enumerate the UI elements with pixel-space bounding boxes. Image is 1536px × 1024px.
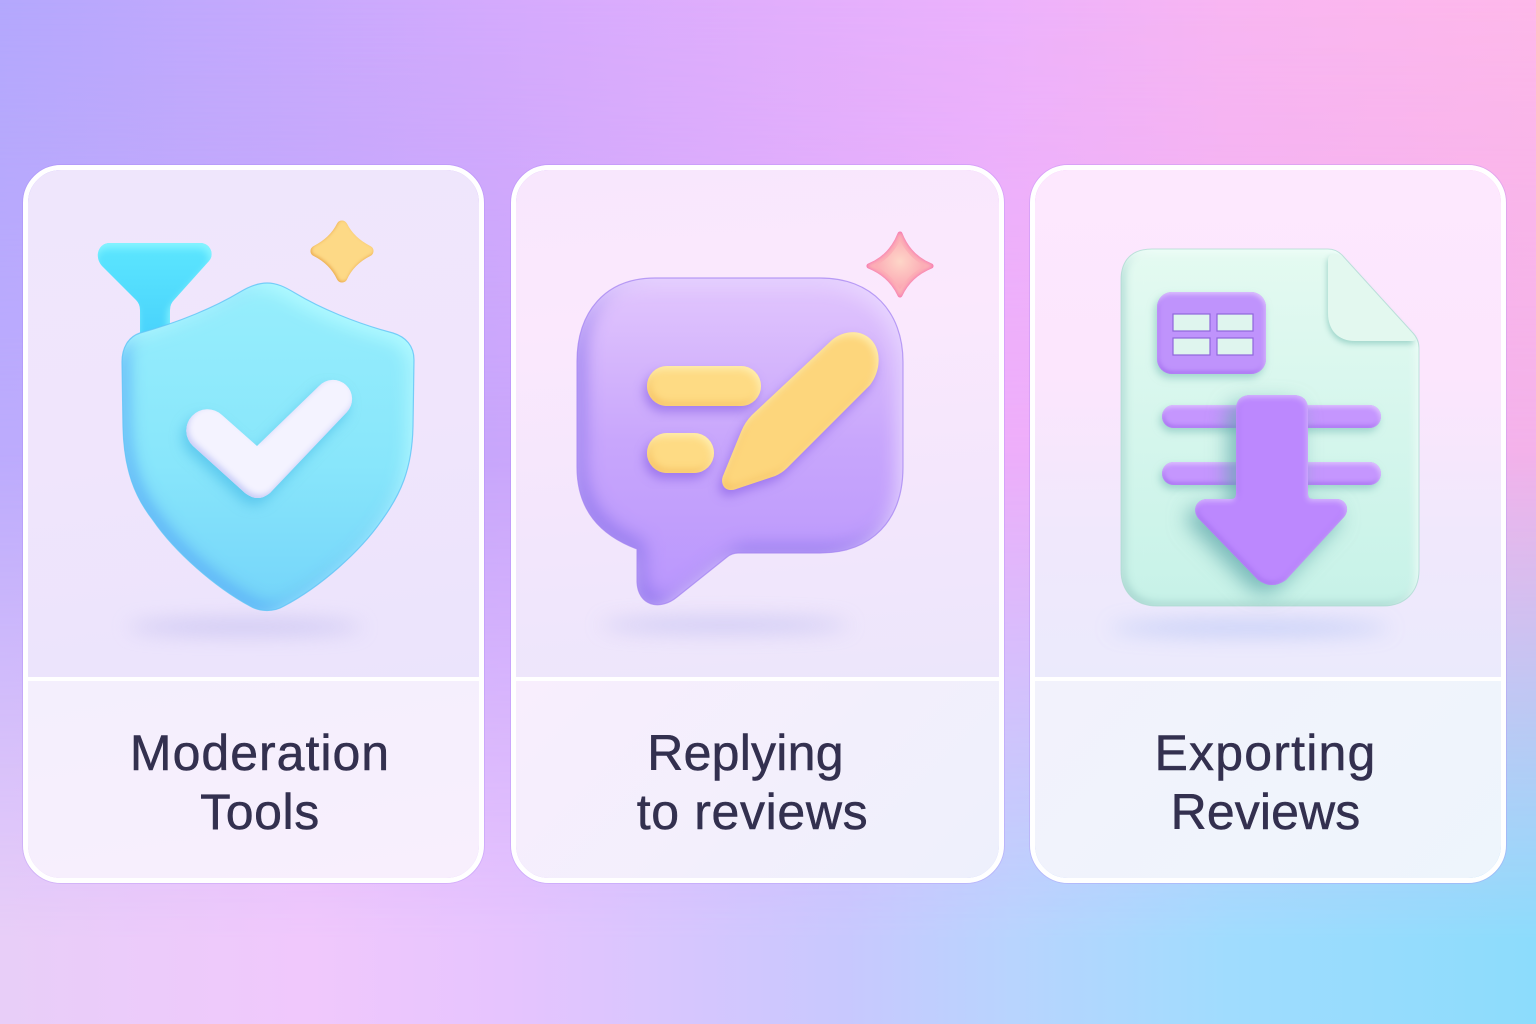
icon: folded corner: [1328, 254, 1415, 341]
panel: replying to reviews: [511, 165, 1004, 883]
label: Exporting Reviews: Exporting: [1154, 724, 1377, 780]
icon: text rows: [1162, 405, 1381, 485]
label: Replying to reviews: to reviews: [637, 784, 868, 840]
ground shadow: [1110, 621, 1390, 635]
label: Replying to reviews: Replying: [647, 724, 844, 780]
ground shadow: [127, 620, 363, 634]
icon: spreadsheet table: [1157, 292, 1266, 374]
icon: download arrow: [1195, 395, 1347, 585]
label: Moderation Tools: Moderation: [130, 724, 390, 780]
ground shadow: [600, 618, 850, 632]
panel: moderation tools: [23, 165, 484, 883]
icon: check mark: [186, 380, 352, 498]
icon: text line long: [647, 366, 761, 406]
label: Moderation Tools: [130, 724, 390, 840]
icon: document: [1121, 249, 1419, 606]
icon: funnel antenna: [98, 243, 212, 340]
label: Moderation Tools: Tools: [200, 784, 320, 840]
icon: gold sparkle: [316, 226, 368, 277]
icon: speech bubble: [577, 278, 903, 605]
icon: text line short: [647, 433, 714, 473]
icon: pink sparkle: [869, 234, 931, 295]
label: Replying to reviews: [637, 724, 868, 840]
panel: exporting reviews: [1030, 165, 1506, 883]
icon: shield: [122, 283, 414, 610]
label: Exporting Reviews: [1154, 724, 1377, 840]
icon: pencil: [722, 332, 879, 490]
label: Exporting Reviews: Reviews: [1171, 784, 1360, 840]
